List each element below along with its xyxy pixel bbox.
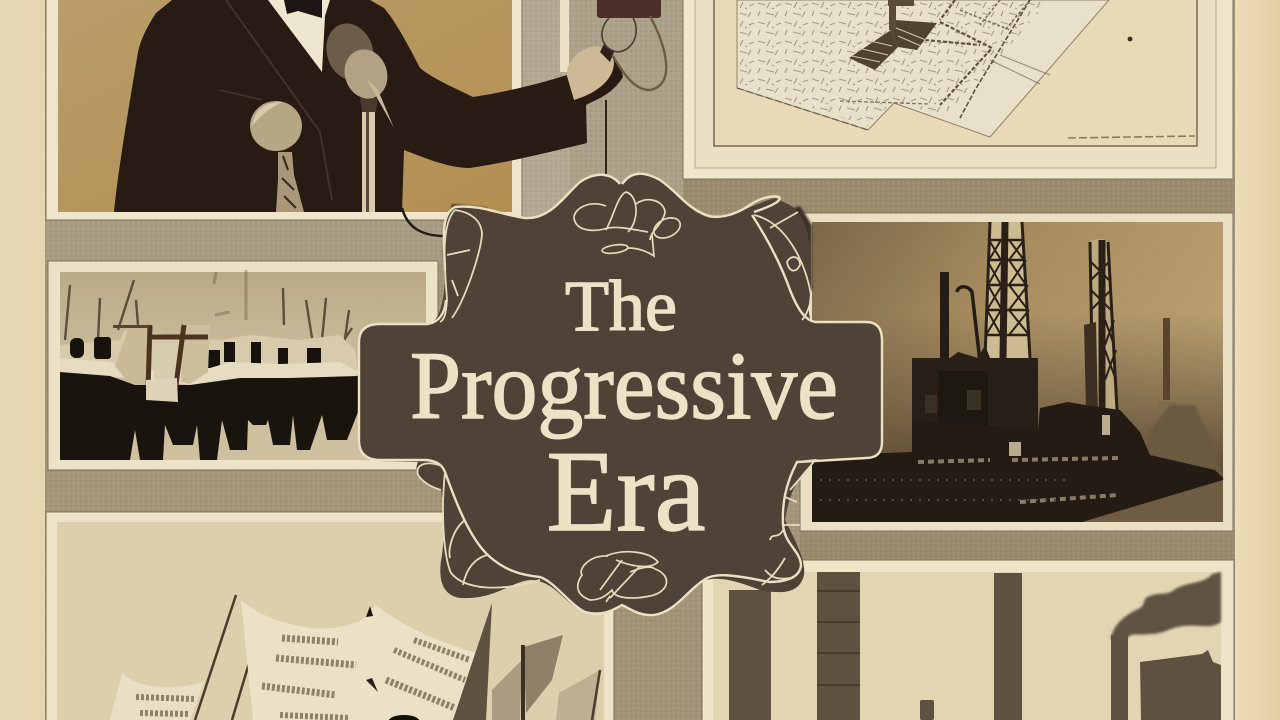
hanging device and wire loops xyxy=(402,0,666,236)
map dot xyxy=(1128,37,1132,41)
white collars band xyxy=(60,358,358,386)
panel: smokestacks xyxy=(702,560,1234,720)
title text: The xyxy=(565,266,677,346)
top ornament xyxy=(574,192,683,256)
hand and sleeve detail xyxy=(567,44,614,100)
hatched city block xyxy=(849,0,937,70)
flag poles xyxy=(195,595,250,720)
dark ground and plant silhouettes xyxy=(812,402,1223,522)
factory block xyxy=(1140,650,1221,720)
plaque body xyxy=(360,174,881,615)
raised sticks and branches xyxy=(65,270,352,360)
left lattice tower xyxy=(985,222,1030,358)
corner scrollwork xyxy=(417,210,815,588)
panel: city map xyxy=(683,0,1233,179)
factory building xyxy=(912,345,1038,470)
stand microphone xyxy=(319,17,394,212)
small banner xyxy=(110,673,204,720)
chimney and bent pipe xyxy=(940,272,1190,460)
plaque shadow lobes xyxy=(443,204,812,300)
main banner xyxy=(241,600,478,720)
panel: suffrage banners xyxy=(46,512,614,720)
panel: marching parade xyxy=(48,261,438,470)
marcher hats xyxy=(70,337,321,368)
title text: Progressive xyxy=(410,332,838,439)
round microphone xyxy=(250,101,304,212)
panel: refinery towers xyxy=(800,213,1233,531)
bottom ornament xyxy=(578,552,666,602)
plaque cream outline xyxy=(359,174,882,615)
title text: Era xyxy=(546,428,706,556)
pale plumes behind the marchers xyxy=(60,330,358,372)
map outline xyxy=(737,0,1109,137)
shirt front and bow tie xyxy=(220,0,332,200)
panel: orator with microphones xyxy=(46,0,623,220)
map streets xyxy=(737,0,1195,138)
map texture xyxy=(740,0,1050,126)
right lattice tower xyxy=(1084,239,1117,410)
title plaque xyxy=(359,174,882,615)
smoke plume xyxy=(1111,572,1221,640)
marching bodies and legs xyxy=(60,372,358,460)
title text xyxy=(410,266,838,556)
chimneys xyxy=(729,572,1128,720)
flags xyxy=(388,603,600,720)
banner frame carried by marchers xyxy=(113,325,210,402)
orator jacket and arm xyxy=(114,0,623,212)
